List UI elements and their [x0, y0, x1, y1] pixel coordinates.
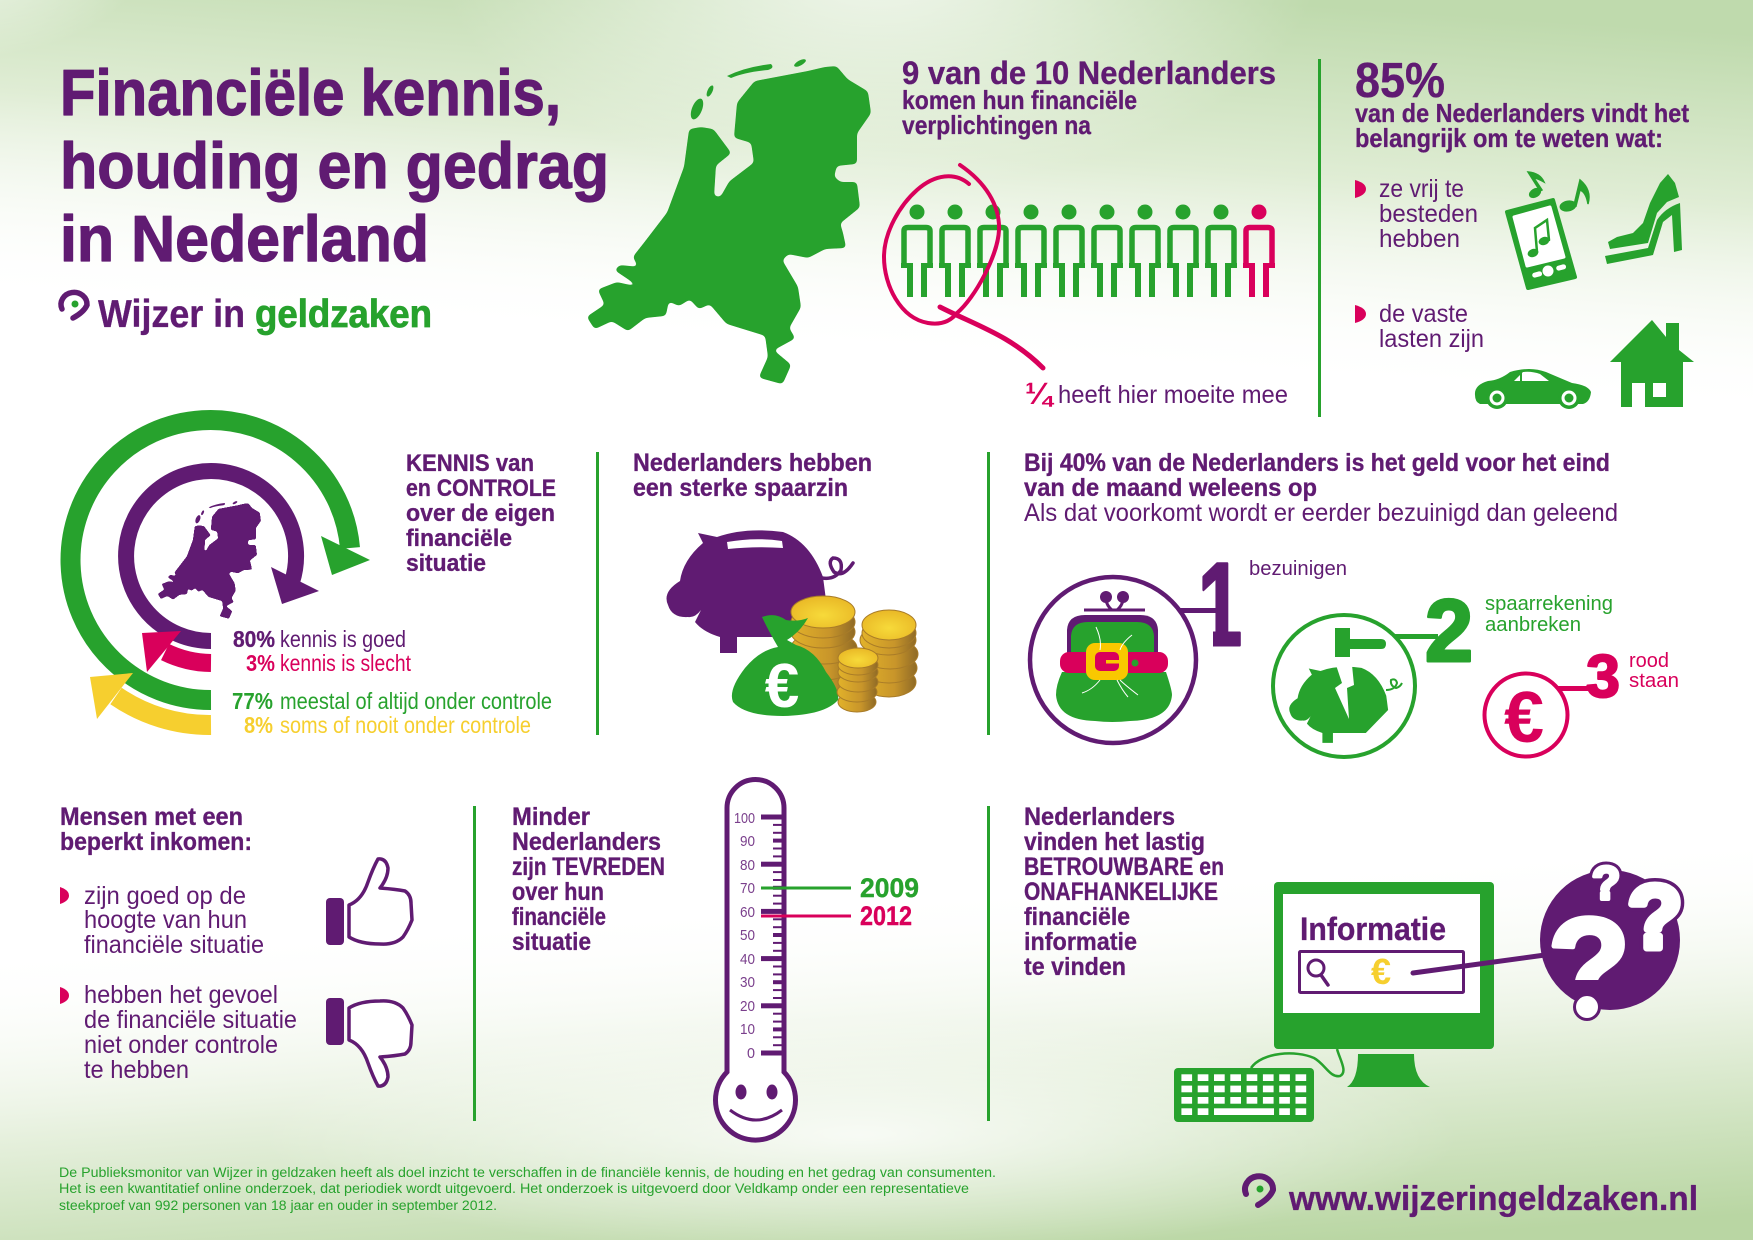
question mark bubble: ? — [1592, 857, 1620, 909]
statistics legend: soms of nooit onder controle — [280, 712, 531, 738]
footnote: De Publieksmonitor van Wijzer in geldzaken heeft als doel inzicht te verschaffen in de financiële kennis, de houding en het gedrag van consumenten. — [59, 1165, 996, 1180]
heading: betrouwbare informatie: te vinden — [1024, 953, 1126, 981]
scale numbers: 60 — [740, 904, 755, 921]
heading: kennis en controle: situatie — [406, 550, 486, 577]
heading: 40 percent: van de maand weleens op — [1024, 474, 1317, 502]
statistics legend: meestal of altijd onder controle — [280, 688, 552, 714]
divider — [987, 806, 990, 1121]
callout: one quarter: ¼ — [1025, 376, 1054, 411]
heading: 85 percent — [1355, 54, 1689, 153]
footnote: Het is een kwantitatief online onderzoek, dat periodiek wordt uitgevoerd. Het onderzoek is uitgevoerd door Veldkamp onder een representatieve — [59, 1181, 969, 1196]
question mark bubble — [1540, 862, 1684, 1021]
divider — [596, 452, 599, 735]
option 3: rood staan — [1484, 643, 1679, 758]
icon: coin stacks — [790, 596, 918, 697]
label spaarrekening: spaarrekening — [1485, 593, 1613, 615]
scale numbers: 10 — [740, 1021, 755, 1038]
icon: keyboard and cable — [1174, 1049, 1343, 1122]
icon: high-heeled shoe — [1605, 174, 1682, 264]
statistics legend: kennis is goed — [280, 626, 406, 652]
icon: purse — [1056, 591, 1172, 722]
bullet: vrij te besteden: besteden — [1379, 200, 1478, 228]
callout: one quarter — [1025, 376, 1288, 411]
heading: betrouwbare informatie: informatie — [1024, 928, 1137, 956]
icon: thumb up — [326, 859, 412, 945]
heading: kennis en controle: en CONTROLE — [406, 475, 556, 502]
search box — [1300, 951, 1464, 992]
bullet: goed op de hoogte: zijn goed op de — [84, 882, 246, 910]
heading: 9 van de 10: verplichtingen na — [902, 110, 1091, 140]
heading: kennis en controle: financiële — [406, 525, 512, 552]
heading: 40 percent: Bij 40% van de Nederlanders is het geld voor het eind — [1024, 449, 1610, 477]
statistics legend: kennis is slecht — [280, 650, 412, 676]
marker 2012 — [761, 901, 912, 931]
heading: 85 percent: 85% — [1355, 54, 1445, 108]
scale numbers: 90 — [740, 833, 755, 850]
heading: betrouwbare informatie: BETROUWBARE en — [1024, 853, 1224, 881]
statistics legend: 80% — [233, 626, 275, 652]
scale numbers: 80 — [740, 857, 755, 874]
heading: betrouwbare informatie — [1024, 803, 1224, 981]
statistics legend: 3% — [246, 650, 275, 676]
title: in Nederland — [60, 202, 429, 275]
label rood staan — [1629, 650, 1679, 692]
heading: beperkt inkomen — [60, 803, 252, 856]
heading: tevreden: Nederlanders — [512, 828, 661, 856]
bullet: vaste lasten: de vaste — [1379, 300, 1468, 328]
purple arrow — [126, 471, 319, 641]
icon: car — [1475, 369, 1591, 409]
scale numbers: 40 — [740, 951, 755, 968]
heading: betrouwbare informatie: Nederlanders — [1024, 803, 1175, 831]
heading: kennis en controle: over de eigen — [406, 500, 555, 527]
heading: 85 percent: belangrijk om te weten wat: — [1355, 123, 1663, 153]
small map of the Netherlands — [159, 501, 260, 618]
scale numbers: 30 — [740, 974, 755, 991]
heading: tevreden: financiële — [512, 903, 606, 931]
icon: money bag: € — [765, 652, 799, 721]
bullet: niet onder controle — [60, 981, 297, 1084]
icon: music phone — [1507, 172, 1589, 288]
bullet: goed op de hoogte: financiële situatie — [84, 931, 264, 959]
logo: Wijzer in geldzaken — [61, 292, 432, 336]
heading: tevreden: zijn TEVREDEN — [512, 853, 665, 881]
title: houding en gedrag — [60, 129, 609, 202]
heading: betrouwbare informatie: financiële — [1024, 903, 1130, 931]
question mark bubble: ? — [1628, 868, 1682, 968]
option 2: spaarrekening piggy — [1273, 581, 1613, 757]
website logo: www.wijzeringeldzaken.nl — [1288, 1180, 1698, 1218]
marker 2009: 2009 — [860, 873, 919, 903]
heading: tevreden: Minder — [512, 803, 590, 831]
heading: tevreden — [512, 803, 665, 956]
label bezuinigen: bezuinigen — [1249, 558, 1347, 580]
bullet: vrij te besteden: hebben — [1379, 225, 1460, 253]
bullet: vrij te besteden — [1355, 175, 1478, 253]
icon: computer monitor — [1274, 882, 1494, 1087]
label spaarrekening — [1485, 593, 1613, 636]
green arrow — [71, 420, 370, 700]
heading Informatie: Informatie — [1300, 911, 1446, 947]
number 3: 3 — [1586, 643, 1620, 710]
bullet: goed op de hoogte — [60, 882, 264, 959]
callout: one quarter: heeft hier moeite mee — [1058, 381, 1288, 409]
question mark bubble: ? — [1628, 868, 1682, 968]
map of the Netherlands — [588, 58, 870, 383]
scale numbers: 20 — [740, 998, 755, 1015]
heading: kennis en controle — [406, 450, 556, 577]
statistics legend: 77% — [232, 688, 273, 714]
title: Financiële kennis, — [60, 56, 561, 129]
label spaarrekening: aanbreken — [1485, 614, 1581, 636]
bullet: vaste lasten — [1355, 300, 1484, 353]
heading: spaarzin: een sterke spaarzin — [633, 474, 848, 502]
bullet: vrij te besteden: ze vrij te — [1379, 175, 1464, 203]
scale numbers: 0 — [747, 1045, 755, 1062]
heading: betrouwbare informatie: vinden het lastig — [1024, 828, 1205, 856]
heading: 9 van de 10: komen hun financiële — [902, 85, 1137, 115]
bullet: goed op de hoogte: hoogte van hun — [84, 906, 247, 934]
heading: tevreden: over hun — [512, 878, 604, 906]
heading: spaarzin: Nederlanders hebben — [633, 449, 872, 477]
heading: 40 percent: Als dat voorkomt wordt er eerder bezuinigd dan geleend — [1024, 499, 1618, 527]
divider — [473, 806, 476, 1121]
heading: betrouwbare informatie: ONAFHANKELIJKE — [1024, 878, 1218, 906]
title — [60, 56, 609, 275]
heading: 40 percent — [1024, 449, 1618, 527]
label rood staan: rood — [1629, 650, 1669, 672]
hand-drawn circle and pointer — [884, 165, 1043, 368]
heading: 85 percent: van de Nederlanders vindt het — [1355, 98, 1689, 128]
number 1: 1 — [1198, 539, 1242, 671]
euro sign: € — [1504, 678, 1544, 758]
pink arrow — [142, 631, 211, 672]
heading: tevreden: situatie — [512, 928, 591, 956]
icon: broken piggy bank — [1289, 665, 1402, 743]
spiral arrows chart — [71, 420, 370, 725]
heading: beperkt inkomen: Mensen met een — [60, 803, 243, 831]
search box: € — [1371, 951, 1391, 992]
bullet: niet onder controle: hebben het gevoel — [84, 981, 278, 1009]
icon: house — [1610, 320, 1694, 407]
pointer stick — [1413, 955, 1545, 973]
icon: money bag — [732, 615, 838, 721]
option 1: bezuinigen purse — [1030, 539, 1347, 743]
divider — [1318, 59, 1321, 417]
question mark bubble: ? — [1592, 857, 1620, 909]
scale numbers: 100 — [734, 810, 755, 827]
heading: 9 van de 10 — [902, 55, 1276, 140]
bullet: niet onder controle: de financiële situatie — [84, 1006, 297, 1034]
smiley face — [730, 1084, 782, 1120]
marker 2012: 2012 — [860, 901, 912, 931]
divider — [987, 452, 990, 735]
bullet: vaste lasten: lasten zijn — [1379, 325, 1484, 353]
scale numbers: 50 — [740, 927, 755, 944]
icon: thumb down — [326, 998, 412, 1086]
heading: 9 van de 10: 9 van de 10 Nederlanders — [902, 55, 1276, 91]
heading: beperkt inkomen: beperkt inkomen: — [60, 828, 252, 856]
statistics legend — [232, 626, 552, 738]
bullet: niet onder controle: niet onder controle — [84, 1031, 278, 1059]
marker 2009 — [761, 873, 919, 903]
scale numbers — [734, 810, 755, 1062]
logo: Wijzer in geldzaken: geldzaken — [255, 293, 432, 336]
icon: purple piggy bank — [666, 530, 853, 653]
label rood staan: staan — [1629, 670, 1679, 692]
question mark bubble: ? — [1548, 890, 1630, 1041]
footnote — [59, 1165, 996, 1213]
thermometer — [715, 780, 796, 1140]
icon: hammer — [1335, 628, 1386, 657]
footnote: steekproef van 992 personen van 18 jaar en ouder in september 2012. — [59, 1198, 497, 1213]
heading: spaarzin — [633, 449, 872, 502]
yellow arrow — [90, 673, 211, 725]
number 2: 2 — [1425, 581, 1473, 680]
heading: kennis en controle: KENNIS van — [406, 450, 534, 477]
bullet: niet onder controle: te hebben — [84, 1056, 189, 1084]
scale numbers: 70 — [740, 880, 755, 897]
pictogram: ten people — [901, 204, 1275, 297]
icon: small coin stack — [837, 648, 878, 712]
scale ticks — [761, 814, 784, 1056]
logo: Wijzer in geldzaken: Wijzer in — [98, 293, 245, 336]
statistics legend: 8% — [244, 712, 273, 738]
